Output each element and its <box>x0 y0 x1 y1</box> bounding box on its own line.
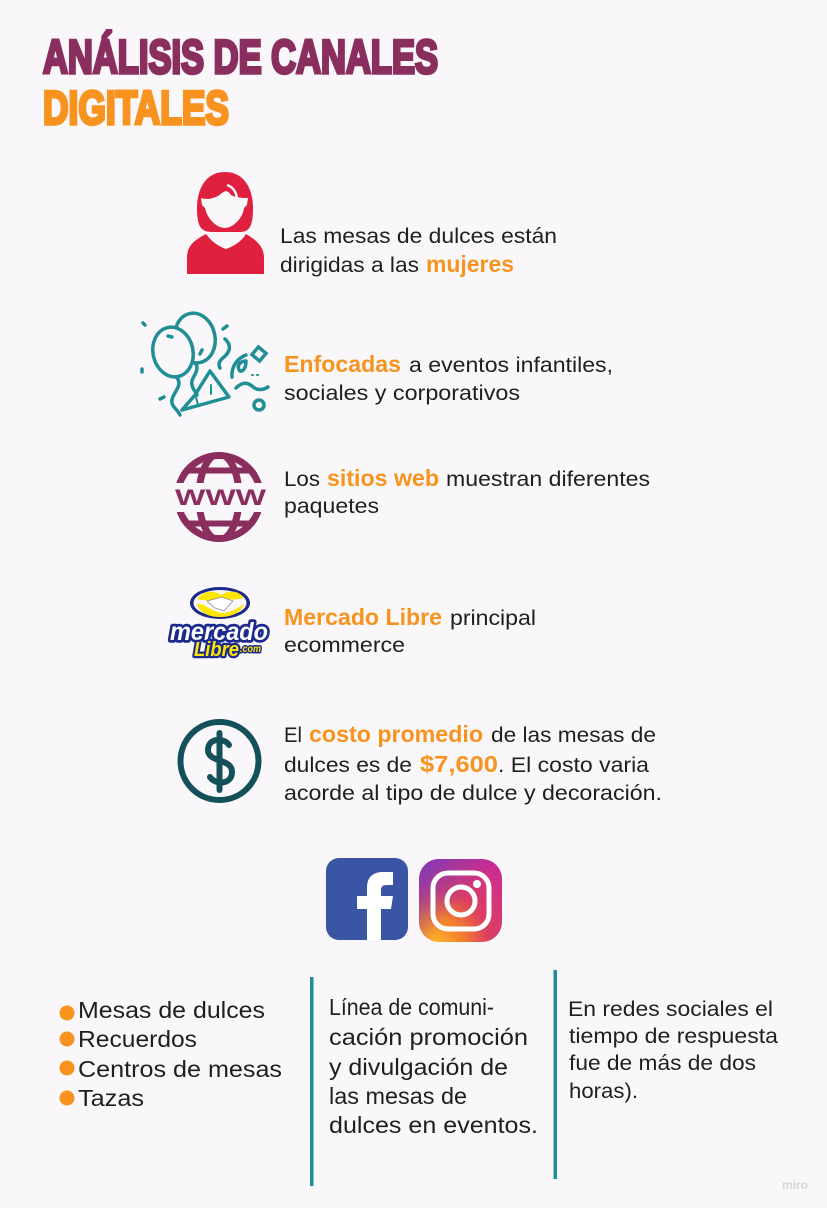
text: Mercado Libre: principal <box>450 607 536 630</box>
text: mujeres: Las mesas de dulces están <box>280 225 557 248</box>
text: response time: horas). <box>569 1080 638 1103</box>
text: costo promedio: $7,600 <box>420 751 498 777</box>
title: DIGITALES <box>43 81 229 134</box>
text: communication line: y divulgación de <box>329 1054 508 1080</box>
list: products: Mesas de dulces <box>78 997 265 1023</box>
text: costo promedio: costo promedio <box>309 721 483 747</box>
divider: left <box>310 977 314 1186</box>
text: communication line: Línea de comuni- <box>329 994 494 1020</box>
text: mujeres: dirigidas a las <box>280 254 419 277</box>
list: products <box>60 997 282 1111</box>
list: products: Recuerdos <box>78 1026 197 1052</box>
divider: right <box>554 970 557 1179</box>
icon: Mercado Libre logo: mercado <box>170 618 268 646</box>
text: eventos: Enfocadas <box>284 351 401 377</box>
text: costo promedio: de las mesas de <box>491 724 656 747</box>
title <box>43 30 438 134</box>
text: costo promedio: . El costo varia <box>498 754 649 777</box>
text: mujeres <box>280 225 557 277</box>
watermark: miro: miro <box>782 1180 808 1192</box>
icon: Facebook <box>326 858 408 940</box>
text: sitios web: muestran diferentes <box>446 468 650 491</box>
icon: www globe: WWW <box>175 485 266 510</box>
icon: Mercado Libre logo: .com <box>240 644 261 655</box>
text: Mercado Libre: ecommerce <box>284 634 405 657</box>
text: costo promedio: dulces es de <box>284 754 412 777</box>
list: products: Centros de mesas <box>78 1056 282 1082</box>
text: response time: fue de más de dos <box>569 1052 756 1075</box>
icon: Mercado Libre logo: Libre <box>194 639 239 661</box>
text: sitios web: paquetes <box>284 495 379 518</box>
text: eventos: sociales y corporativos <box>284 382 520 405</box>
text: eventos <box>284 351 613 405</box>
text: communication line: cación promoción <box>329 1024 528 1050</box>
text: costo promedio: acorde al tipo de dulce y decoración. <box>284 782 662 805</box>
text: sitios web <box>284 465 650 518</box>
text: costo promedio <box>284 721 662 805</box>
text: response time <box>568 998 778 1103</box>
text: communication line: las mesas de <box>329 1083 467 1109</box>
text: costo promedio: El <box>284 724 302 747</box>
text: response time: tiempo de respuesta <box>569 1025 778 1048</box>
text: communication line <box>329 994 538 1138</box>
list: products: Tazas <box>78 1085 144 1111</box>
text: mujeres: mujeres <box>426 251 514 277</box>
text: communication line: dulces en eventos. <box>329 1112 538 1138</box>
text: response time: En redes sociales el <box>568 998 773 1021</box>
icon: Mercado Libre logo <box>170 587 268 661</box>
icon: Instagram <box>419 859 502 942</box>
icon: www globe <box>170 454 268 540</box>
text: eventos: a eventos infantiles, <box>409 354 613 377</box>
text: sitios web: sitios web <box>327 465 439 491</box>
text: Mercado Libre: Mercado Libre <box>284 604 442 630</box>
text: sitios web: Los <box>284 468 320 491</box>
title: ANÁLISIS DE CANALES <box>43 30 438 83</box>
icon: dollar coin <box>180 722 258 800</box>
text: Mercado Libre <box>284 604 536 657</box>
icon: balloons and party hat <box>142 309 268 415</box>
icon: woman <box>187 172 264 274</box>
